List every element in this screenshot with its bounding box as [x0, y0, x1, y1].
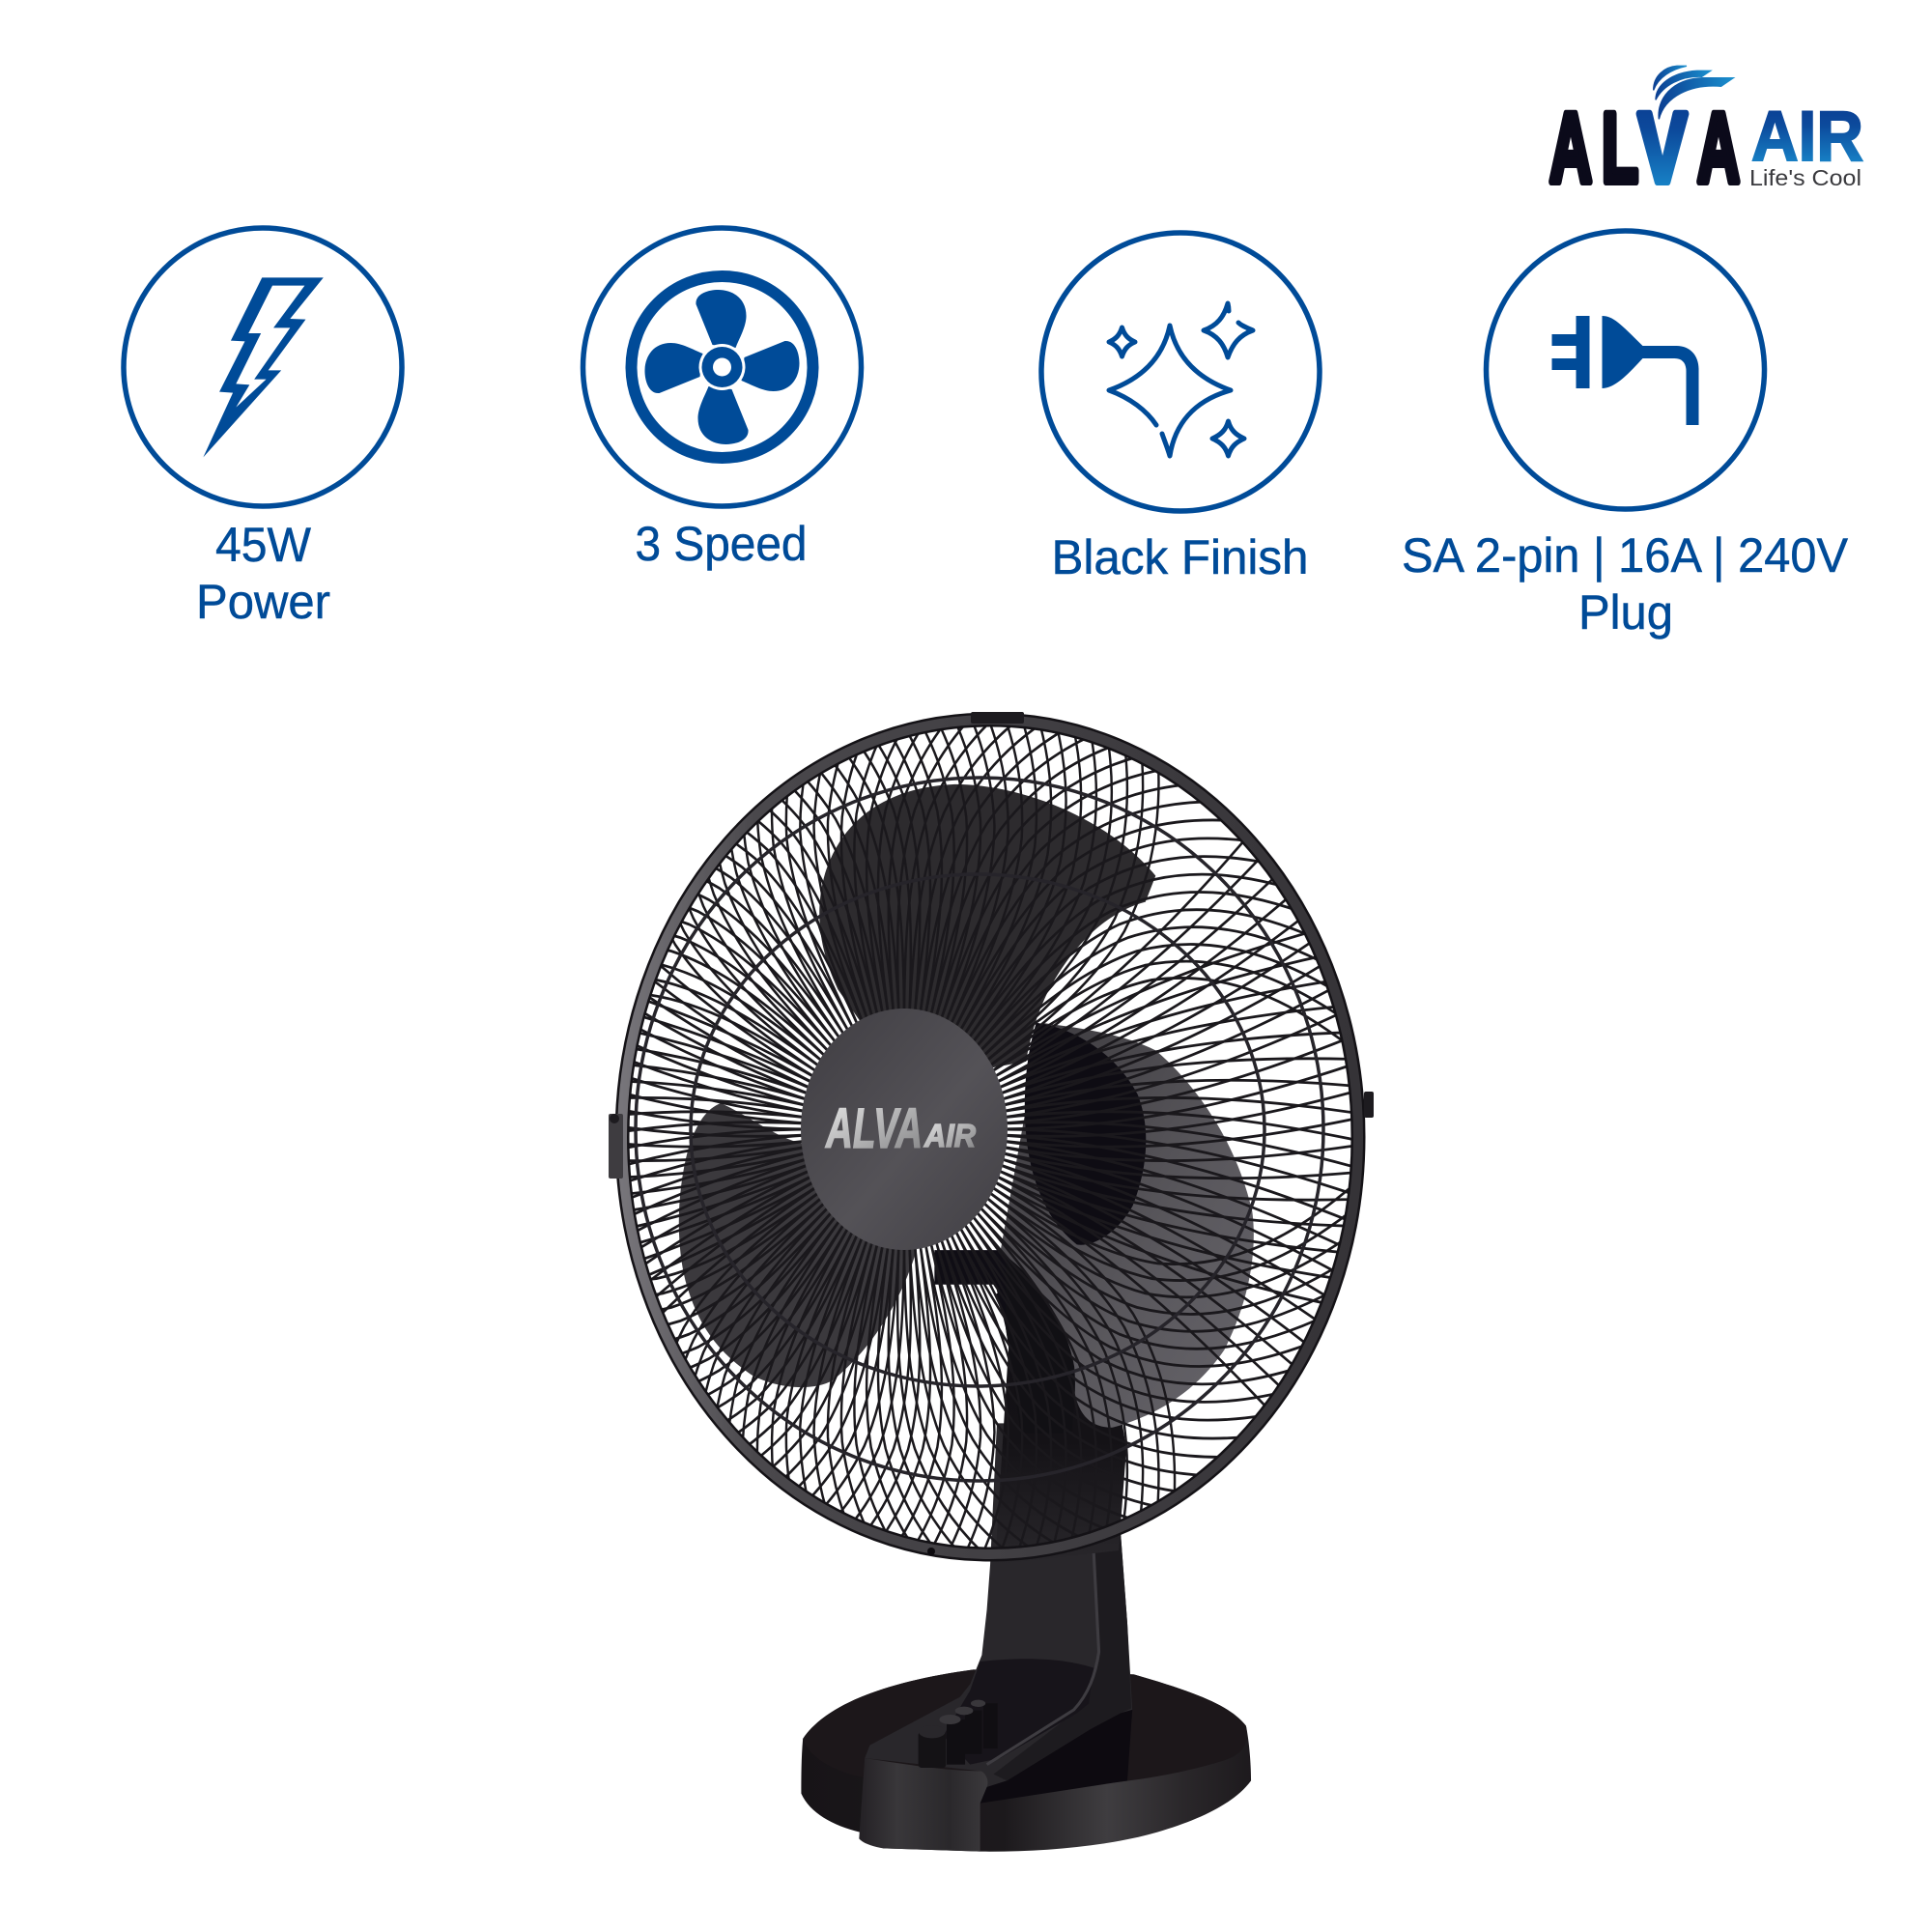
- logo wordmark AIR: AIR: [1751, 98, 1863, 176]
- label: Black Finish: Black Finish: [1051, 530, 1308, 584]
- hub logo text: AIR: [923, 1118, 976, 1153]
- blade: left: [679, 1103, 917, 1387]
- motor shadow: [934, 1250, 1093, 1389]
- icon: plug: [1551, 316, 1698, 425]
- neck: [865, 1423, 1132, 1787]
- label: SA 2-pin plug: SA 2-pin | 16A | 240V: [1402, 528, 1849, 582]
- logo wordmark ALVA: A: [1549, 93, 1592, 203]
- icon circle: [1486, 231, 1764, 509]
- logo wings: [1654, 66, 1733, 119]
- logo wordmark ALVA: V: [1638, 93, 1687, 203]
- feature: 3 speed: [583, 228, 862, 571]
- label: 3 Speed: 3 Speed: [636, 517, 808, 571]
- feature: black finish: [1041, 233, 1320, 584]
- fan outer rim: [622, 720, 1358, 1554]
- feature: SA plug: [1402, 231, 1849, 639]
- label: 45W Power: 45W: [215, 518, 312, 572]
- icon circle: [124, 228, 402, 506]
- blade: right inner shadow: [1025, 1023, 1146, 1245]
- label: SA 2-pin plug: Plug: [1578, 585, 1673, 639]
- product photo: desk fan: [609, 712, 1374, 1852]
- fan blades: [679, 784, 1254, 1434]
- neck side face: [993, 1423, 1131, 1780]
- pedestal front: [859, 1758, 988, 1852]
- blade: right lower shadow band: [1006, 1256, 1075, 1434]
- blade: top: [819, 784, 1155, 1084]
- control deck shadow: [944, 1659, 1094, 1765]
- icon circle: [583, 228, 862, 506]
- hub logo text: ALVA: [825, 1097, 923, 1160]
- label: 45W Power: Power: [196, 575, 330, 629]
- icon: sparkles: [1109, 303, 1253, 456]
- logo wordmark ALVA: [1549, 93, 1740, 203]
- logo tagline: Life's Cool: [1749, 165, 1861, 190]
- label: 45W Power: [196, 518, 330, 629]
- label: SA 2-pin plug: [1402, 528, 1849, 639]
- neck dark lower wedge: [980, 1710, 1132, 1804]
- feature: 45W power: [124, 228, 402, 629]
- base top surface: [803, 1669, 1247, 1788]
- deck glossy edge: [987, 1543, 1099, 1765]
- icon: lightning bolt: [203, 277, 324, 457]
- control knobs: [919, 1700, 998, 1768]
- rear column behind grille: [995, 1256, 1126, 1565]
- blade: right: [1001, 1023, 1254, 1428]
- logo: Alva Air: [1549, 66, 1863, 203]
- logo wordmark ALVA: L: [1602, 93, 1638, 203]
- grille wires: [630, 726, 1350, 1548]
- rim clips: [609, 712, 1374, 1555]
- icon: fan: [632, 276, 813, 458]
- base disc: [801, 1669, 1251, 1852]
- logo wordmark ALVA: A: [1697, 93, 1740, 203]
- fan base and stand: [801, 1423, 1251, 1852]
- center hub with logo: [801, 1009, 1008, 1250]
- icon circle: [1041, 233, 1320, 511]
